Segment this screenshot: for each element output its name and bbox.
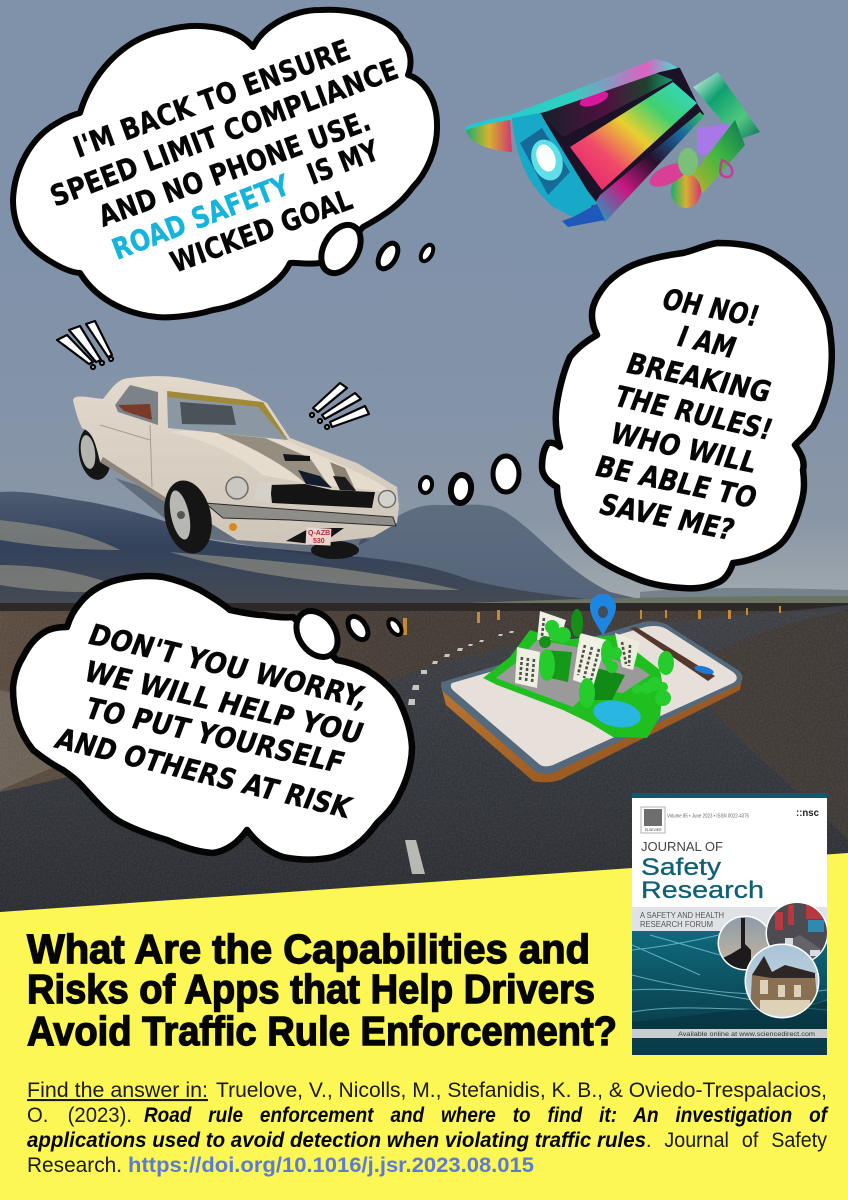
- citation: Truelove, V., Nicolls, M., Stefanidis, K. B., & Oviedo-Trespalacios,: [216, 1079, 827, 1102]
- thought tail: [419, 456, 519, 504]
- title: Risks of Apps that Help Drivers: [27, 966, 595, 1012]
- camera body: [540, 62, 704, 222]
- bubble text: WE WILL HELP YOU: [79, 655, 368, 750]
- licence plate: Q-AZB: [308, 530, 330, 537]
- title: [27, 926, 617, 1054]
- side window: [115, 385, 158, 425]
- speech bubble: app: [13, 576, 412, 860]
- journal cover: RESEARCH FORUM: [640, 919, 713, 929]
- location pin: [590, 594, 616, 635]
- title: Avoid Traffic Rule Enforcement?: [27, 1008, 617, 1054]
- rear wheel: [75, 424, 115, 482]
- door seam: [100, 425, 152, 487]
- bubble text: I AM: [672, 320, 741, 365]
- journal name: JOURNAL OF: [641, 840, 723, 854]
- pond: [591, 697, 643, 731]
- bubble text: BREAKING: [622, 347, 776, 409]
- bubble outline: [13, 10, 437, 317]
- phone body: [442, 623, 742, 782]
- bubble text: ROAD SAFETY: [107, 167, 295, 267]
- bubble text: THE RULES!: [610, 380, 778, 446]
- ground and road: [0, 603, 848, 923]
- citation: . Journal of Safety: [646, 1129, 827, 1152]
- journal cover: A SAFETY AND HEALTH: [640, 910, 724, 920]
- camera bracket: [693, 72, 760, 140]
- bubble text: [50, 618, 373, 825]
- exclamation marks right: [310, 383, 369, 429]
- front wheel: [158, 476, 218, 558]
- journal name: Safety: [641, 854, 721, 881]
- trees: [539, 609, 674, 708]
- publisher logo: [641, 807, 665, 833]
- windshield: [167, 392, 288, 440]
- bubble text: WHO WILL: [606, 417, 762, 479]
- journal name: [641, 842, 762, 898]
- exclamation marks left: [57, 321, 113, 369]
- mountains: [0, 492, 848, 604]
- bubble text: I'M BACK TO ENSURE: [69, 33, 355, 165]
- publisher logo: ELSEVIER: [645, 828, 662, 832]
- citation: Find the answer in:: [27, 1079, 208, 1102]
- car shadow: [115, 478, 370, 558]
- phone notch and car: [630, 627, 715, 681]
- photo circles: [715, 900, 830, 1019]
- phone screen: [451, 626, 737, 766]
- journal cover: [632, 793, 830, 1055]
- journal cover: Volume 85 • June 2023 • ISSN 0022-4375: [667, 814, 749, 820]
- bubble text: [46, 33, 403, 280]
- journal name: Research: [641, 877, 764, 904]
- journal cover: Available online at www.sciencedirect.com: [678, 1031, 815, 1038]
- camera front and lens: [512, 113, 597, 217]
- teal wave area: [632, 931, 827, 1055]
- car body: [73, 376, 399, 545]
- buildings: [515, 611, 640, 688]
- yellow title panel: [0, 853, 848, 1200]
- title: What Are the Capabilities and: [27, 926, 590, 972]
- forum band: [632, 907, 827, 931]
- icon: rainbow security camera: [465, 59, 760, 227]
- bubble text: SAVE ME?: [595, 487, 739, 547]
- green map base: [483, 630, 663, 738]
- building windows: [520, 618, 630, 683]
- sky background: [0, 0, 848, 610]
- bubble outline: [542, 243, 832, 588]
- bubble text: OH NO!: [658, 282, 764, 333]
- thought tail: [288, 603, 404, 665]
- bubble text: DON'T YOU WORRY,: [83, 618, 373, 715]
- headlights: [226, 477, 248, 499]
- citation: [27, 1079, 829, 1177]
- bubble text: IS MY: [302, 133, 384, 192]
- citation: https://doi.org/10.1016/j.jsr.2023.08.015: [128, 1154, 534, 1177]
- far front wheel: [311, 541, 359, 559]
- grille: [270, 484, 375, 508]
- bubble text: WICKED GOAL: [166, 182, 357, 280]
- bubble text: SPEED LIMIT COMPLIANCE: [46, 52, 403, 214]
- icon: phone with 3D city map: [441, 594, 742, 782]
- citation: applications used to avoid detection when violating traffic rules: [27, 1129, 646, 1152]
- bubble text: TO PUT YOURSELF: [81, 692, 349, 780]
- bubble outline: [13, 576, 412, 860]
- camera joint: [671, 174, 701, 208]
- icon: classic white car: [73, 376, 399, 559]
- speech bubble: car: [419, 243, 832, 588]
- availability strip: [632, 1029, 827, 1038]
- licence plate: 530: [313, 538, 325, 545]
- bubble text: [591, 282, 778, 547]
- citation: Research.: [27, 1154, 122, 1177]
- hood stripes: [217, 433, 330, 487]
- chrome bumper: [205, 503, 396, 526]
- bubble text: AND NO PHONE USE.: [94, 103, 375, 234]
- thought tail: [313, 218, 436, 280]
- licence plate: [306, 527, 331, 546]
- journal cover: ::nsc: [796, 808, 819, 819]
- bubble text: BE ABLE TO: [591, 449, 762, 515]
- citation: O. (2023).: [27, 1104, 132, 1127]
- speech bubble: camera: [13, 10, 437, 317]
- bubble text: AND OTHERS AT RISK: [50, 722, 358, 825]
